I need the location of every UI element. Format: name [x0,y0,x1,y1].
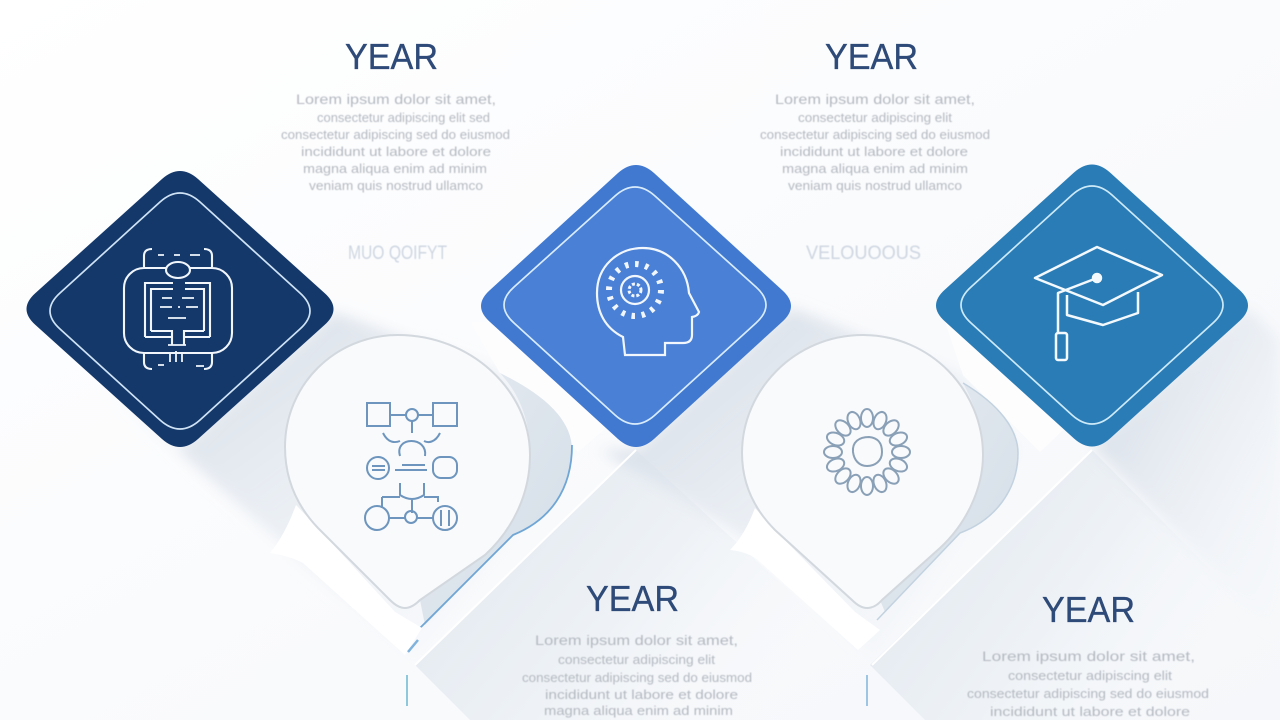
text block: year 3: veniam quis nostrud ullamco [788,178,962,193]
text block: year 1: magna aliqua enim ad minim [303,161,487,176]
text block: year 3: Lorem ipsum dolor sit amet, [775,91,975,107]
text block: year 1: veniam quis nostrud ullamco [309,178,483,193]
text block: year 4: consectetur adipiscing elit [1008,668,1172,683]
text block: year 2: consectetur adipiscing elit [558,652,715,667]
heading: year 2: YEAR [586,578,679,619]
text block: year 3: incididunt ut labore et dolore [780,144,968,159]
faded label left: MUO QOIFYT [348,243,447,264]
panel: pin 2 with ring icon [742,335,983,608]
text block: year 3: magna aliqua enim ad minim [782,161,968,176]
icon: ring of petals [824,409,910,495]
icon: book tablet [124,249,232,369]
text block: year 1: consectetur adipiscing sed do eiusmod [281,127,510,142]
text block: year 4: consectetur adipiscing sed do eiusmod [967,686,1209,701]
text block: year 1: Lorem ipsum dolor sit amet, [296,91,496,107]
text block: year 4: Lorem ipsum dolor sit amet, [982,648,1195,664]
panel: diamond 3 [936,164,1248,446]
panel: diamond 2 [481,165,791,447]
heading: year 4: YEAR [1042,589,1135,630]
text block: year 3: consectetur adipiscing sed do eiusmod [760,127,990,142]
connector tick 1 [406,675,408,706]
panel: bottom right year text [967,589,1209,719]
faded label right: VELOUOOUS [806,243,921,264]
text block: year 2: Lorem ipsum dolor sit amet, [535,632,738,648]
heading: year 3: YEAR [825,36,918,77]
text block: year 1 [281,91,510,193]
text block: year 2: incididunt ut labore et dolore [545,687,738,702]
text block: year 1: consectetur adipiscing elit sed [317,110,490,125]
icon: graduation cap [1035,247,1162,360]
text block: year 3 [760,91,990,193]
text block: year 3: consectetur adipiscing elit [798,110,952,125]
text block: year 4: incididunt ut labore et dolore [990,704,1190,719]
connector tick 2 [866,675,868,706]
panel: diamond 1 [26,171,334,447]
pin 1 back plate [270,322,636,665]
text block: year 2: magna aliqua enim ad minim [544,703,733,718]
text block: year 2: consectetur adipiscing sed do eiusmod [522,670,752,685]
icon: head with brain [597,248,699,355]
text block: year 4 [967,648,1209,719]
icon: flow chart figure [365,403,457,530]
text block: year 2 [522,632,752,718]
panel: top right year text [760,36,990,193]
panel: top left year text [281,36,510,193]
text block: year 1: incididunt ut labore et dolore [301,144,491,159]
shadows cast by diamonds [100,308,1280,720]
panel: bottom left year text [522,578,752,718]
heading: year 1: YEAR [345,36,438,77]
pin 2 back plate [730,322,1092,665]
panel: pin 1 with flow icon [285,335,530,608]
